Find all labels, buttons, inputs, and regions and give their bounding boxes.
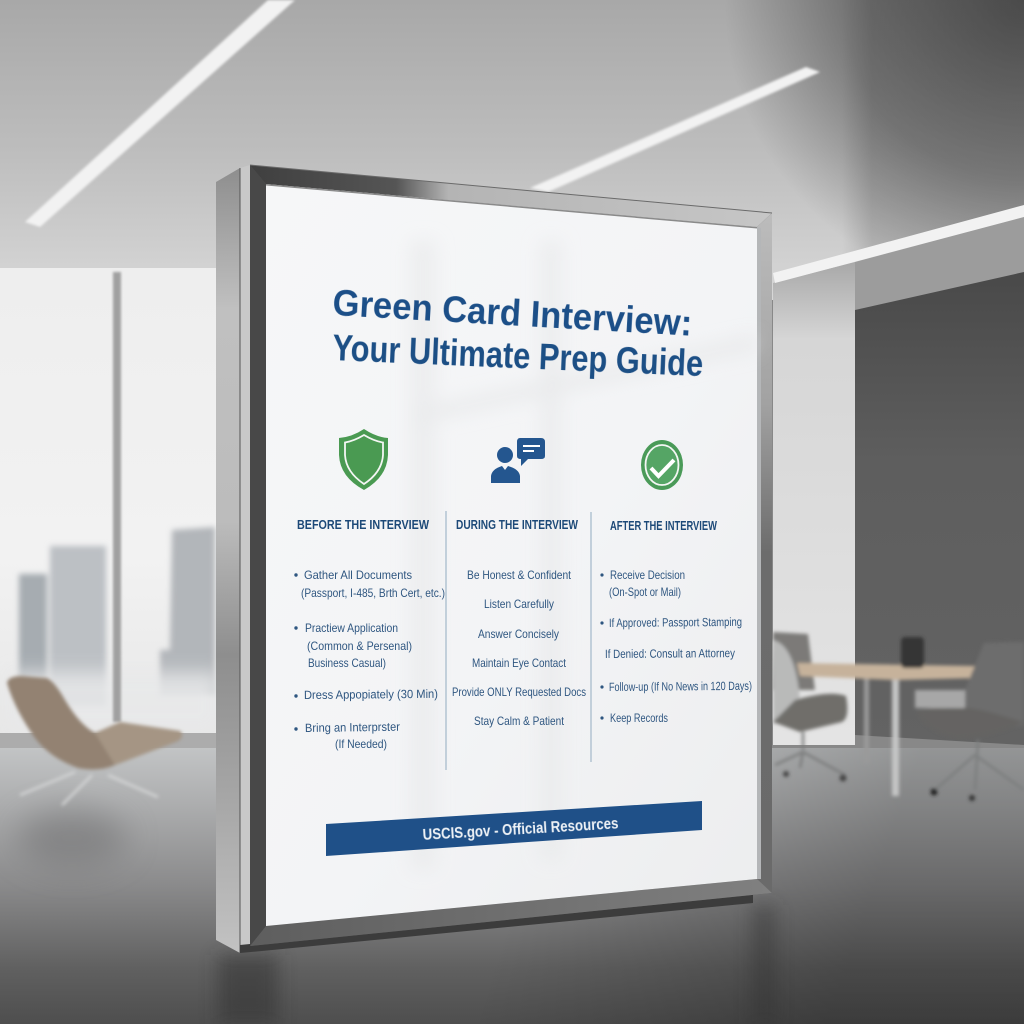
icon: person with speech bubble [491,438,545,483]
floor [0,748,1024,1024]
window wall with city view [0,268,220,751]
column: during the interview: Listen Carefully [484,597,554,611]
column: after the interview: (On-Spot or Mail) [609,585,681,599]
lounge chair [7,676,182,805]
column dividers [446,511,591,770]
ceiling shading [700,0,1024,312]
soft reflection on panel [410,240,757,870]
column: during the interview: Stay Calm & Patient [474,714,565,728]
title [332,282,704,384]
white panel [266,184,757,926]
right office chair [915,642,1024,801]
column: before the interview: Dress Appopiately (30 Min) [304,687,438,702]
column: after the interview [600,519,752,725]
left office chair [772,632,847,782]
column: before the interview: BEFORE THE INTERVIEW [297,518,429,532]
column: during the interview: Provide ONLY Requested Docs [452,685,586,699]
column: after the interview: If Denied: Consult an Attorney [605,646,735,661]
column: before the interview: Gather All Documents [304,568,412,582]
column: after the interview: Keep Records [610,711,668,725]
resource banner: USCIS.gov - Official Resources [422,815,619,844]
table top [797,663,975,680]
column: after the interview: Follow-up (If No News in 120 Days) [609,679,752,694]
dark wall panel [855,272,1024,745]
column: before the interview: Practiew Application [305,621,398,635]
sign side face [216,168,240,953]
column: before the interview: (Common & Persenal) [307,639,412,653]
sign front frame [250,165,772,946]
column: after the interview: If Approved: Passport Stamping [609,615,742,630]
ceiling light strips [25,0,1024,283]
column: during the interview: Maintain Eye Contact [472,656,567,670]
column: during the interview [452,518,586,728]
title: Green Card Interview: [332,282,693,344]
column: before the interview: Business Casual) [308,656,386,670]
column: before the interview: (If Needed) [335,737,387,751]
vase on table [901,637,924,668]
column: during the interview: Answer Concisely [478,627,559,641]
sign base [240,893,753,953]
icon: green check [641,440,683,490]
column: after the interview: AFTER THE INTERVIEW [610,519,717,533]
column: before the interview: Bring an Interprster [305,720,400,735]
meeting table and chairs [772,632,1024,801]
column: before the interview: (Passport, I-485, Brth Cert, etc.) [301,586,445,600]
column: during the interview: DURING THE INTERVIEW [456,518,578,532]
right wall [773,262,855,745]
display sign [216,165,772,953]
table legs [892,678,899,796]
column: during the interview: Be Honest & Confident [467,568,572,582]
resource banner [326,801,702,856]
column: after the interview: Receive Decision [610,568,685,582]
title: Your Ultimate Prep Guide [332,327,704,384]
column: before the interview [294,518,445,751]
icon: green shield [339,429,388,490]
